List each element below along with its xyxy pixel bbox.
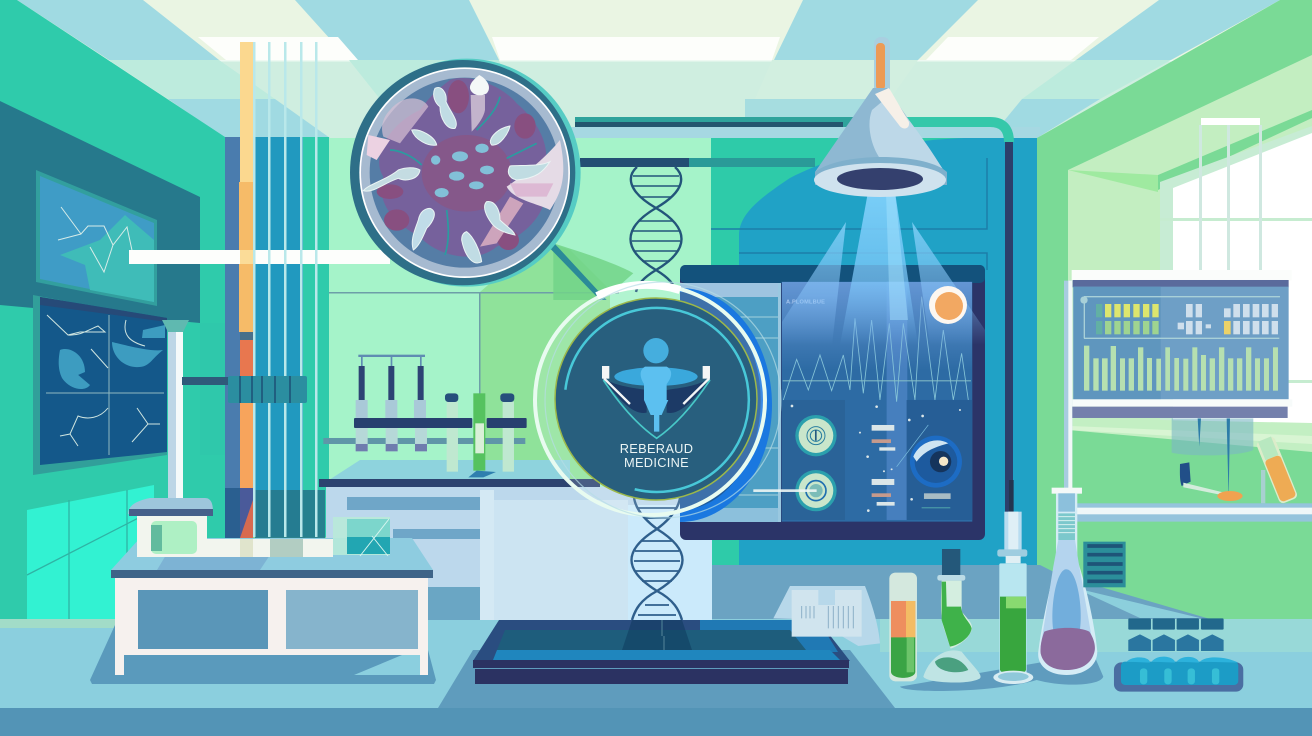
orange indicator light [929, 286, 967, 324]
badge emblem: human figure [602, 338, 710, 438]
magnified cell lens [350, 59, 633, 300]
bench glassware [773, 480, 1243, 692]
dial upper [795, 415, 837, 456]
right wall and window [1037, 0, 1312, 630]
monitor screen [753, 282, 972, 522]
graduated cylinder [993, 480, 1033, 684]
DNA helix upper [630, 167, 682, 292]
mid cabinet [326, 487, 712, 620]
monitor left data panel [680, 283, 781, 522]
floor and counter [0, 565, 1312, 736]
pipes [575, 117, 1013, 512]
waveform chart [783, 297, 968, 402]
wall screen: map graph [36, 170, 157, 306]
centre back wall [329, 138, 714, 488]
monitor screen: A.PLOMLBUE [786, 299, 825, 305]
dial lower [753, 470, 837, 511]
glass tray [473, 620, 850, 684]
right monitor with bar chart [1064, 270, 1312, 522]
stand pole [162, 320, 307, 505]
stacked blocks [1114, 618, 1243, 692]
light beams [782, 192, 985, 370]
test tube rack [323, 355, 527, 477]
specimen container [128, 498, 333, 557]
small readout labels [791, 405, 961, 512]
overhead lamp [814, 37, 947, 197]
wall board: diagrams [33, 295, 167, 475]
DNA helix lower [632, 498, 682, 620]
regenerative medicine badge: MEDICINE [624, 455, 689, 470]
window rods [1199, 118, 1262, 270]
counter top of mid cabinet [319, 479, 600, 487]
thin glass tubes over bar [240, 42, 318, 537]
ceiling [0, 0, 1312, 140]
funnel with green liquid [923, 549, 981, 683]
regenerative medicine badge [535, 282, 781, 522]
back panel and wall cabinets [711, 138, 1037, 570]
white horizontal bar [129, 250, 390, 264]
bars [1084, 346, 1278, 391]
glass block [333, 517, 390, 556]
left wall [0, 0, 225, 640]
lab desk left [90, 538, 436, 684]
printer device [773, 586, 880, 646]
blue sphere [897, 425, 962, 488]
erlenmeyer flask [1038, 488, 1097, 675]
big monitor [680, 265, 985, 540]
badge label: REBERAUD [620, 441, 693, 456]
test tube orange and green [889, 573, 917, 681]
vent grille [1083, 542, 1126, 587]
vertical tube column [225, 42, 329, 538]
